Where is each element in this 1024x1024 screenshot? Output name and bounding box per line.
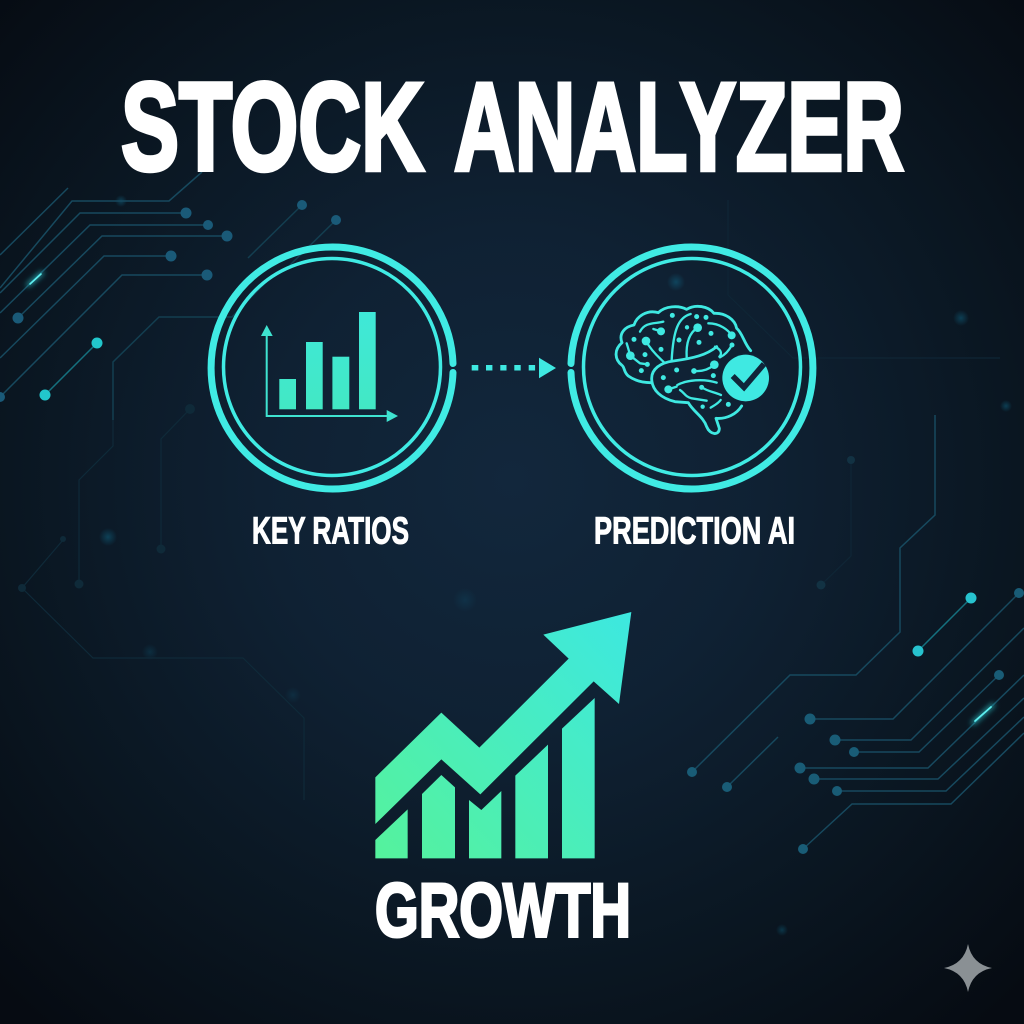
- label: key ratios: KEY RATIOS: [252, 510, 409, 552]
- title: STOCK: [121, 58, 424, 197]
- dotted arrow: [472, 358, 556, 378]
- glowing dots: lower right: [912, 592, 976, 656]
- light streak: right: [973, 705, 993, 723]
- faint circuit traces: lower left: [18, 404, 304, 800]
- icon: sparkle watermark: [944, 944, 992, 992]
- circuit traces: upper left: [0, 172, 341, 420]
- icon: brain with check: [616, 306, 771, 434]
- faint circuit traces: upper right: [728, 200, 1000, 590]
- prediction ai ring: [571, 247, 813, 489]
- icon: bar chart: [261, 312, 398, 422]
- light streak: left: [28, 273, 42, 285]
- background glow spots: [99, 195, 1012, 936]
- title: [121, 58, 904, 197]
- icon: growth arrow with bars: [375, 612, 631, 858]
- circuit traces: lower right: [687, 415, 1024, 854]
- label: prediction ai: PREDICTION AI: [594, 510, 795, 552]
- label: growth: GROWTH: [375, 868, 631, 954]
- key ratios ring: [211, 247, 453, 489]
- glowing dots: upper left: [40, 338, 102, 400]
